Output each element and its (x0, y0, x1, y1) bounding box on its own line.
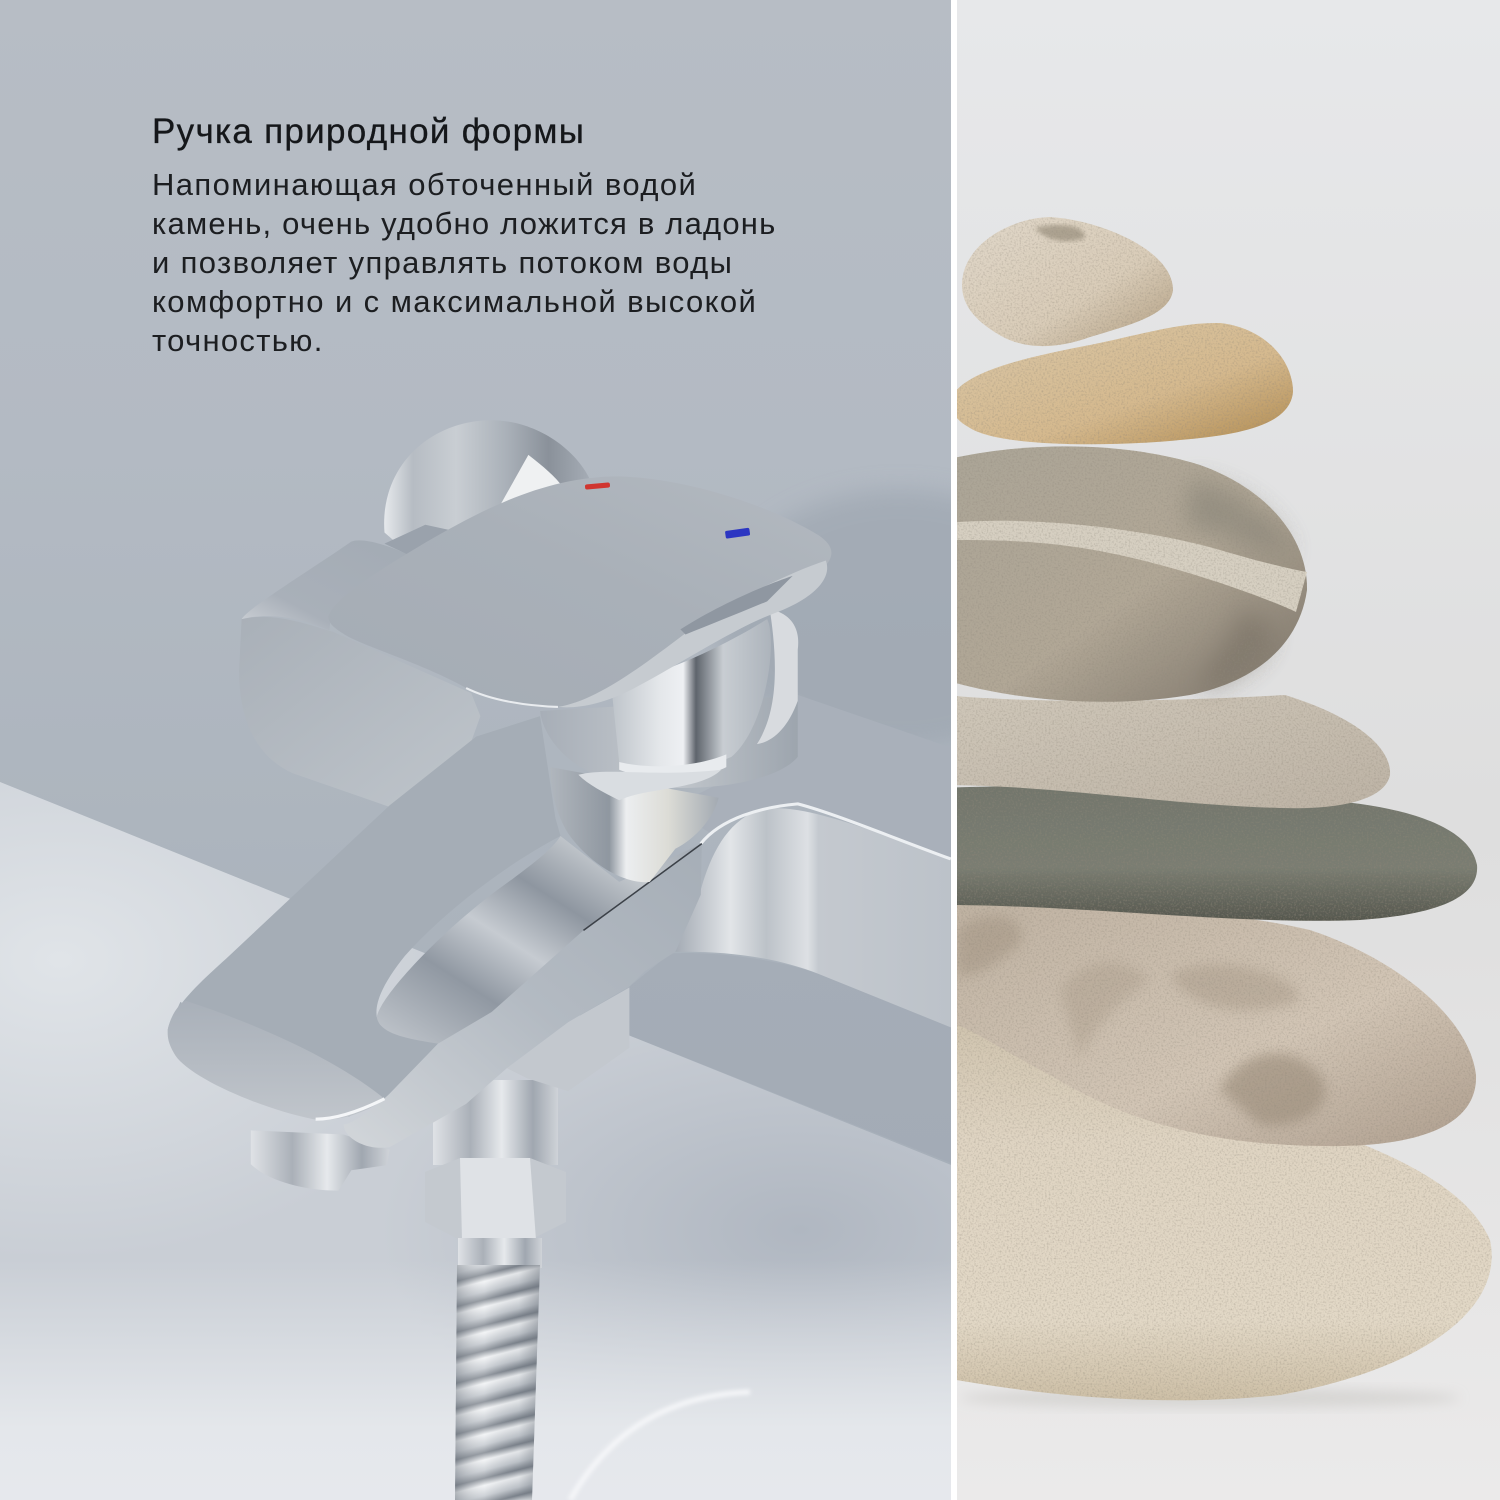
flexible shower hose (455, 1265, 540, 1500)
cartridge neck (564, 770, 706, 882)
wall background (0, 0, 951, 1165)
bathtub rim (0, 782, 951, 1500)
text block: Напоминающая обточенный водой (152, 167, 697, 202)
stone 4 flat light (945, 695, 1390, 808)
handle housing (239, 525, 480, 807)
neck highlight ripple (578, 770, 721, 800)
window top rim highlight (701, 804, 951, 859)
stone 6 patterned (945, 903, 1476, 1146)
hose connector (433, 1080, 558, 1268)
body window reflection (675, 808, 951, 1027)
wall mount dome (384, 420, 590, 550)
aerator (251, 1130, 390, 1191)
text block (152, 167, 776, 358)
stone 2 amber (950, 323, 1293, 444)
panel: faucet photo (0, 0, 951, 1500)
text block: комфортно и с максимальной высокой (152, 284, 757, 319)
bracket below spout (533, 988, 630, 1088)
cold indicator (725, 528, 750, 539)
stone 7 bottom (945, 1000, 1492, 1400)
spout top face (168, 716, 561, 1117)
upper ring (757, 609, 798, 744)
collar cylinder (612, 619, 771, 769)
contact shadow (960, 1388, 1460, 1408)
spout hollow reflection (377, 836, 702, 1044)
deck right of column (670, 693, 956, 860)
stone 3 banded (945, 446, 1307, 702)
stone 5 green-grey (945, 786, 1477, 921)
cylinder shine (619, 754, 726, 773)
lower collar (540, 696, 798, 788)
heading: Ручка природной формы (152, 112, 585, 151)
light background (957, 0, 1500, 1500)
faucet assembly, drawn in a scaled coordinate space (168, 420, 956, 1191)
spout front highlight (316, 1099, 384, 1119)
panel: stacked stones photo (945, 0, 1500, 1500)
lower right body (630, 1036, 636, 1038)
spout underside band (350, 890, 701, 1148)
lever handle (328, 476, 831, 707)
wall shading near faucet (726, 492, 951, 742)
text block: точностью. (152, 323, 324, 358)
spout dark edge (583, 844, 702, 930)
spout front lip (168, 1001, 384, 1120)
text block: камень, очень удобно ложится в ладонь (152, 206, 776, 241)
text block: и позволяет управлять потоком воды (152, 245, 733, 280)
stone 1 top (962, 217, 1173, 346)
hot indicator (585, 482, 610, 490)
stones stack with grain (945, 217, 1492, 1400)
